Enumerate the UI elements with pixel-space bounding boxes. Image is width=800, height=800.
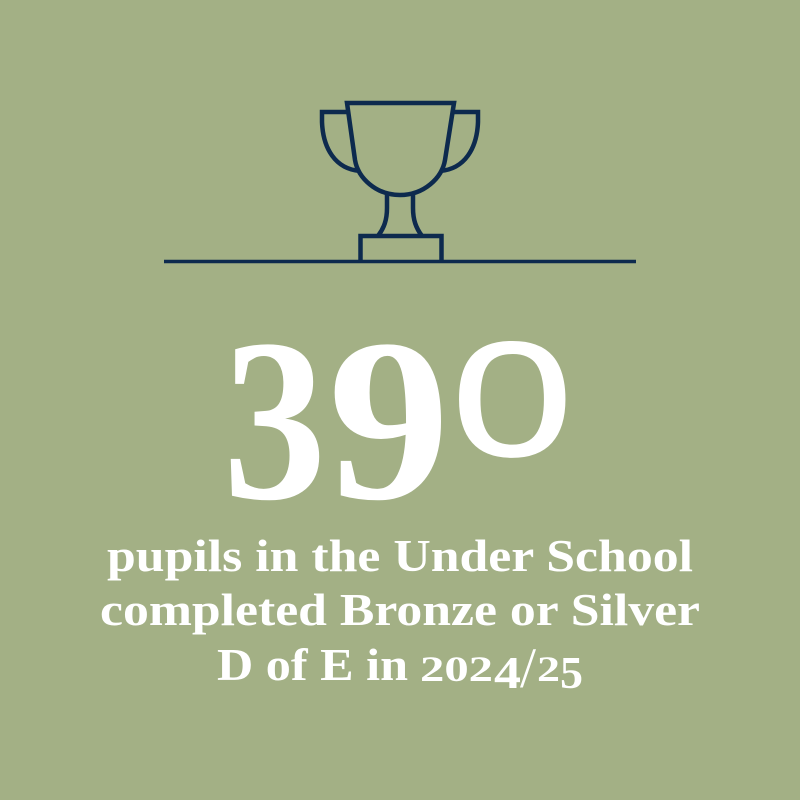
caption line 3: 202 <box>420 649 493 689</box>
big number: 390 <box>223 291 573 549</box>
caption line 3: 5 <box>560 647 583 698</box>
trophy cup <box>347 103 454 195</box>
caption line 3: D of E in <box>217 639 408 690</box>
caption line 3: 4 <box>494 647 521 698</box>
big number: 390: 9 <box>328 292 450 549</box>
big number: 390: 0 <box>452 308 573 490</box>
caption line 2: completed Bronze or Silver <box>100 584 700 635</box>
ground line <box>164 260 636 263</box>
caption line 3: 2 <box>537 649 560 689</box>
trophy stem <box>378 195 422 236</box>
caption line 1: pupils in the Under School <box>107 530 693 581</box>
trophy base <box>360 236 442 261</box>
trophy left handle <box>322 112 360 171</box>
caption line 3: / <box>520 637 536 700</box>
caption text <box>100 530 700 700</box>
trophy right handle <box>440 112 478 171</box>
caption line 3 <box>217 637 583 700</box>
icon: trophy on a horizontal line <box>164 103 636 262</box>
big number: 390: 3 <box>223 291 326 549</box>
